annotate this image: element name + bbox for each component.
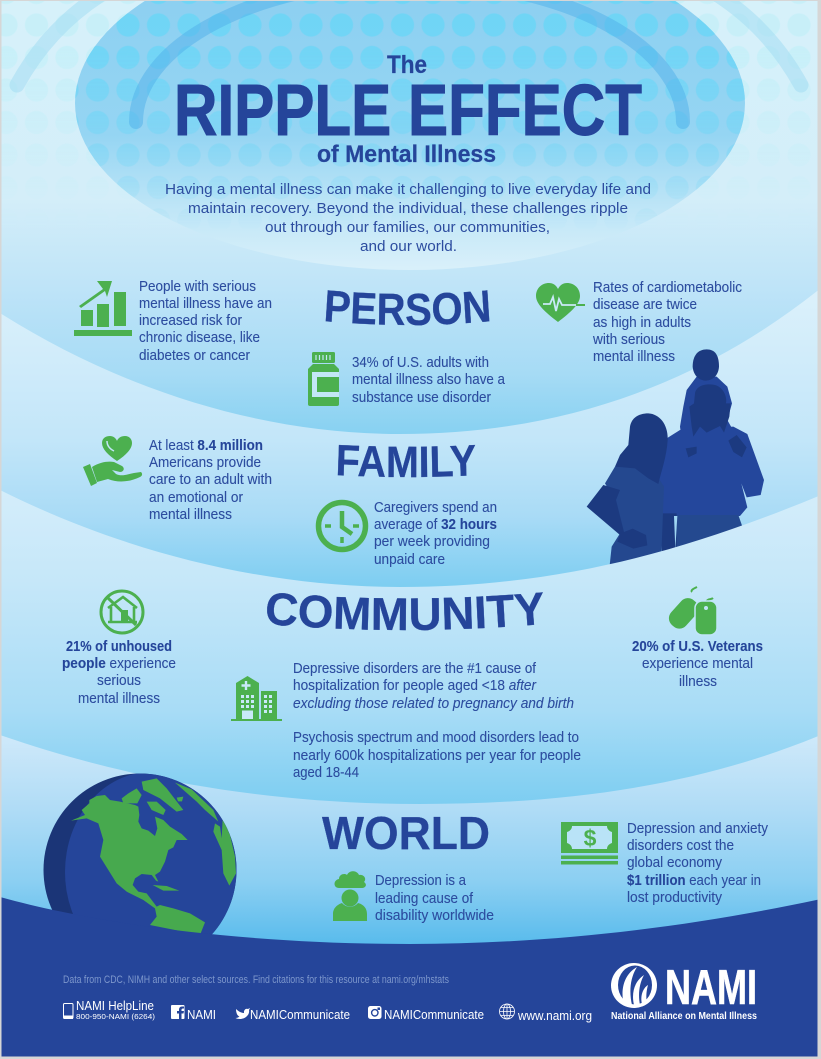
text: unhoused people: serious (97, 673, 141, 689)
text: caregivers count (149, 438, 272, 523)
panel: world band background (2, 736, 818, 944)
heading: PERSON: PERSON (326, 290, 490, 326)
icon: clock (318, 502, 366, 550)
footer: NAMI logo (611, 961, 757, 1022)
text: cardiometabolic disease: mental illness (593, 349, 675, 365)
text: cardiometabolic disease: as high in adults (593, 315, 691, 331)
central ripple ellipse (75, 0, 745, 270)
footer: facebook (171, 1005, 216, 1022)
text: cardiometabolic disease: with serious (592, 332, 665, 348)
footer: facebook: NAMI (187, 1008, 216, 1022)
icon: stack of money (561, 822, 618, 864)
decorative outer dots (2, 1, 810, 114)
intro text (165, 181, 651, 255)
text: disability: Depression is a (375, 873, 467, 889)
text: unhoused people: mental illness (78, 691, 160, 707)
intro text: out through our families, our communities, (265, 219, 550, 236)
text: unpaid care hours: per week providing (374, 534, 490, 550)
icon: rising bar chart (74, 281, 132, 336)
footer: helpline: 800-950-NAMI (6264) (76, 1012, 156, 1021)
heading: COMMUNITY: COMMUNITY (267, 592, 543, 630)
illustration: family silhouette (587, 349, 764, 568)
inner ripple arch (136, 0, 683, 122)
text: cardiometabolic disease (592, 280, 742, 365)
title line: The: The (387, 51, 427, 79)
text: hospitalization statistics (293, 661, 581, 781)
text: hospitalization statistics: aged 18-44 (293, 765, 359, 781)
title line: Ripple Effect: RIPPLE EFFECT (174, 71, 642, 151)
text: chronic disease risk: mental illness have an (139, 296, 272, 312)
intro text: and our world. (360, 238, 457, 255)
icon: crossed-out house (101, 591, 143, 633)
panel: community band background (2, 490, 818, 788)
footer: helpline: NAMI HelpLine (76, 999, 154, 1013)
footer: NAMI logo: National Alliance on Mental Illness (611, 1011, 757, 1022)
icon: hospital (231, 676, 282, 721)
icon: person under cloud (333, 871, 367, 921)
panel: person band background (0, 0, 821, 440)
text: economic cost: disorders cost the (627, 838, 734, 854)
ellipse dot pattern (75, 1, 745, 210)
icon: hand holding heart (83, 436, 142, 486)
text: caregivers count: care to an adult with (149, 472, 272, 488)
text: chronic disease risk: diabetes or cancer (139, 348, 250, 364)
text: veterans: experience mental (642, 656, 753, 672)
text: unpaid care hours: unpaid care (374, 552, 445, 568)
text: hospitalization statistics: nearly 600k hospitalizations per year for people (293, 748, 581, 764)
text: hospitalization statistics: Psychosis spectrum and mood disorders lead to (293, 730, 579, 746)
text: economic cost (627, 821, 769, 906)
text: substance use disorder: 34% of U.S. adults with (352, 355, 489, 371)
text: unpaid care hours (374, 500, 497, 568)
text: chronic disease risk (139, 279, 272, 364)
title (174, 51, 642, 168)
text: substance use disorder: substance use disorder (352, 390, 491, 406)
left outer ripple arc (17, 0, 108, 85)
panel: family band background (2, 291, 818, 587)
text: cardiometabolic disease: Rates of cardiometabolic (593, 280, 742, 296)
text: substance use disorder: mental illness also have a (352, 372, 506, 388)
text: cardiometabolic disease: disease are twice (593, 297, 697, 313)
text: veterans: illness (679, 674, 717, 690)
text: disability: disability worldwide (375, 908, 494, 924)
text: chronic disease risk: People with serious (139, 279, 256, 295)
footer band (0, 897, 821, 1059)
text: economic cost: global economy (627, 855, 723, 871)
text: unpaid care hours: average of 32 hours (374, 517, 497, 533)
text: disability: leading cause of (375, 891, 474, 907)
text: unhoused people: people experience (62, 656, 176, 672)
text: caregivers count: Americans provide (149, 455, 261, 471)
heading: FAMILY: FAMILY (338, 444, 476, 478)
text: hospitalization statistics: excluding those related to pregnancy and birth (293, 696, 574, 712)
footer: instagram: NAMICommunicate (384, 1008, 484, 1022)
text: unhoused people: 21% of unhoused (66, 639, 172, 655)
footer: NAMI logo: NAMI (665, 961, 757, 1015)
text: economic cost: $1 trillion each year in (627, 873, 761, 889)
right outer ripple arc (710, 0, 801, 85)
heading: FAMILY (338, 444, 476, 478)
footer: website (500, 1004, 592, 1023)
footer source note: Data from CDC, NIMH and other select sources. Find citations for this resource at nami.org/mhstats (63, 974, 449, 986)
heading: COMMUNITY (267, 592, 543, 630)
text: caregivers count: mental illness (149, 507, 232, 523)
footer: twitter: NAMICommunicate (250, 1008, 350, 1022)
heading: PERSON (326, 290, 490, 326)
text: disability (375, 873, 494, 924)
text: hospitalization statistics: hospitalization for people aged <18 after (293, 678, 537, 694)
illustration: globe (44, 774, 236, 934)
text: economic cost: Depression and anxiety (627, 821, 769, 837)
intro text: Having a mental illness can make it challenging to live everyday life and (165, 181, 651, 198)
footer: website: www.nami.org (517, 1009, 592, 1023)
text: substance use disorder (352, 356, 505, 402)
title line: of Mental Illness: of Mental Illness (317, 141, 496, 168)
text: unpaid care hours: Caregivers spend an (374, 500, 497, 516)
icon: heart with pulse (536, 283, 585, 322)
icon: stack of money: $ (584, 825, 597, 851)
text: chronic disease risk: chronic disease, like (139, 330, 260, 346)
intro text: maintain recovery. Beyond the individual, these challenges ripple (188, 200, 628, 217)
text: caregivers count: At least 8.4 million (149, 438, 263, 454)
text: veterans: 20% of U.S. Veterans (632, 639, 763, 655)
text: veterans (632, 640, 762, 686)
text: chronic disease risk: increased risk for (139, 313, 242, 329)
text: economic cost: lost productivity (627, 890, 723, 906)
icon: dog tags (665, 587, 717, 635)
text: caregivers count: an emotional or (149, 490, 243, 506)
heading: WORLD: WORLD (322, 807, 490, 859)
text: unhoused people (62, 639, 176, 707)
icon: medicine bottle (308, 352, 339, 406)
text: hospitalization statistics: Depressive disorders are the #1 cause of (293, 661, 537, 677)
footer: helpline (64, 999, 156, 1021)
